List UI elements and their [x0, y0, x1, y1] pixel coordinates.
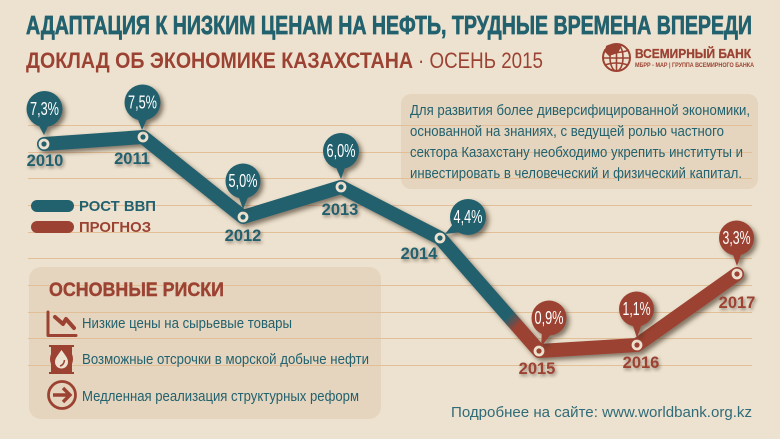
- callout: 2013 6,0%: 6,0%: [326, 141, 356, 161]
- callout: 2016 1,1%: [619, 292, 654, 338]
- subtitle: · ОСЕНЬ 2015: [418, 48, 543, 73]
- callout: 2014 4,4%: [445, 199, 486, 235]
- logo: World Bank: МБРР - МАР | ГРУППА ВСЕМИРНОГО БАНКА: [635, 62, 754, 69]
- year labels: 2010: [27, 152, 63, 170]
- text block: summary: инвестировать в человеческий и физический капитал.: [410, 166, 742, 182]
- year labels: 2017: [719, 294, 755, 312]
- callout: 2011 7,5%: 7,5%: [128, 92, 157, 112]
- logo: World Bank: ВСЕМИРНЫЙ БАНК: [635, 46, 751, 61]
- callout: 2015 0,9%: 0,9%: [534, 308, 564, 328]
- legend: [31, 198, 156, 236]
- callout: 2017 3,3%: [719, 220, 754, 266]
- callout: 2016 1,1%: 1,1%: [622, 299, 650, 319]
- footer link text: Подробнее на сайте: www.worldbank.org.kz: [451, 404, 752, 421]
- callout: 2011 7,5%: [124, 84, 160, 130]
- logo: World Bank: [603, 44, 754, 71]
- callout: 2012 5,0%: [226, 164, 260, 209]
- panel: key risks: [48, 280, 369, 408]
- callout: 2012 5,0%: 5,0%: [228, 171, 258, 191]
- legend: РОСТ ВВП: [79, 198, 156, 215]
- risk text 1: Низкие цены на сырьевые товары: [82, 316, 292, 332]
- year labels: 2016: [623, 354, 659, 372]
- subtitle: ДОКЛАД ОБ ЭКОНОМИКЕ КАЗАХСТАНА: [26, 48, 413, 73]
- icon: falling chart: [48, 312, 76, 336]
- data nodes: [40, 133, 741, 355]
- text block: summary: [410, 103, 750, 182]
- text block: summary: сектора Казахстану необходимо укрепить институты и: [410, 145, 743, 161]
- year labels: [27, 150, 755, 378]
- risk text 3: Медленная реализация структурных реформ: [82, 389, 359, 405]
- panel: summary background: [401, 94, 758, 189]
- text block: summary: Для развития более диверсифицированной экономики,: [410, 103, 750, 119]
- icon: oil barrel: [49, 345, 74, 374]
- line chart: GDP growth: [44, 137, 737, 351]
- callout: 2010 7,3%: [26, 91, 62, 135]
- callout: 2015 0,9%: [532, 300, 566, 347]
- year labels: 2011: [114, 150, 150, 168]
- legend: ПРОГНОЗ: [79, 219, 151, 236]
- risk text 2: Возможные отсрочки в морской добыче нефти: [82, 352, 369, 368]
- year labels: 2013: [322, 201, 358, 219]
- icon: arrow in circle: [48, 382, 76, 408]
- year labels: 2012: [225, 227, 261, 245]
- year labels: 2015: [519, 360, 555, 378]
- callout: 2014 4,4%: 4,4%: [454, 207, 482, 227]
- year labels: 2014: [401, 245, 438, 263]
- callout: 2010 7,3%: 7,3%: [30, 99, 59, 119]
- text block: summary: основанной на знаниях, с ведущей ролью частного: [410, 124, 724, 140]
- heading: key risks: ОСНОВНЫЕ РИСКИ: [49, 280, 224, 301]
- callout: 2013 6,0%: [323, 133, 359, 179]
- panel: risks background: [29, 267, 381, 419]
- callout: 2017 3,3%: 3,3%: [722, 228, 750, 248]
